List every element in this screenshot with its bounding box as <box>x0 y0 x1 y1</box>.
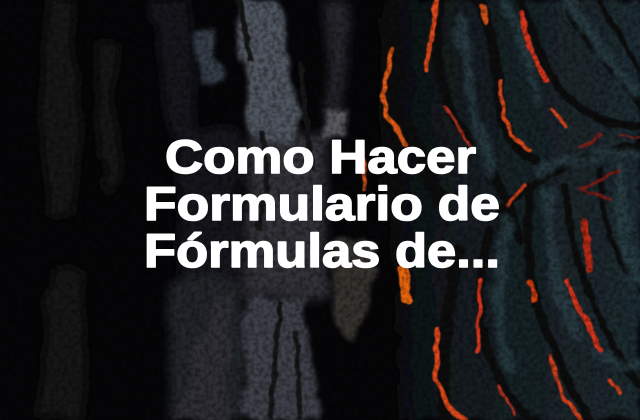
title <box>144 130 500 277</box>
background: glowing lava cracks <box>362 2 640 420</box>
title line 3: Fórmulas de... <box>144 224 500 277</box>
title line 2: Formulario de <box>144 177 500 230</box>
background: cooled lava strands <box>378 0 640 420</box>
title line 1: Como Hacer <box>165 130 476 183</box>
